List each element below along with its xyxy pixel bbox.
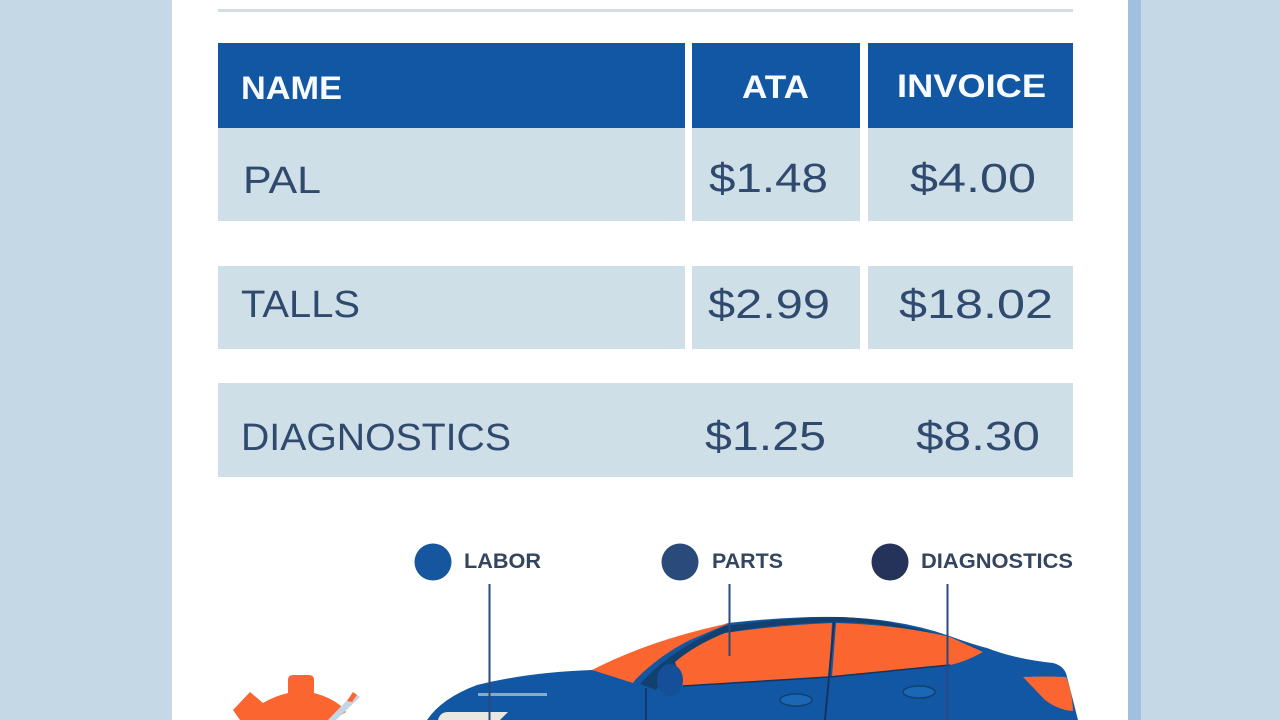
illustration: car [427,617,1078,720]
car tail light [1023,676,1073,711]
car door handle rear [903,686,935,698]
table header row: INVOICE [897,68,1046,104]
table row: DIAGNOSTICS [218,383,1073,477]
table header row: ATA [742,69,809,105]
legend: parts [662,544,783,656]
table row: TALLS [218,266,1073,349]
table: invoice costs [218,43,1073,477]
icon: orange gear with wrench [233,675,360,720]
legend: diagnostics [872,544,1073,720]
car door handle front [780,694,812,706]
legend: diagnostics: DIAGNOSTICS [921,550,1073,573]
table row: TALLS: TALLS [241,284,360,326]
car side mirror [657,664,683,696]
table row: TALLS: $18.02 [899,281,1053,327]
panel: invoice sheet [172,0,1141,720]
car window sill [683,665,950,686]
car door pillar [825,622,834,720]
car front side window [675,623,832,686]
legend: labor: LABOR [464,550,541,573]
table row: PAL: $1.48 [709,155,828,201]
table row: DIAGNOSTICS: $1.25 [705,413,826,459]
table row: PAL: PAL [243,160,321,202]
car body [427,617,1078,720]
legend: labor [414,544,541,720]
car windshield [592,623,730,683]
table header row: NAME [241,70,342,106]
table row: PAL: $4.00 [910,155,1036,201]
table row: TALLS: $2.99 [708,281,830,327]
table row: PAL [218,128,1073,221]
table row: DIAGNOSTICS: $8.30 [916,413,1040,459]
car headlight [438,712,508,720]
table row: DIAGNOSTICS: DIAGNOSTICS [241,417,511,459]
car hood highlight [478,693,547,696]
legend: parts: PARTS [712,550,783,573]
car roof edge [640,617,985,690]
car rear side window [832,623,983,677]
table header row [218,43,1073,128]
